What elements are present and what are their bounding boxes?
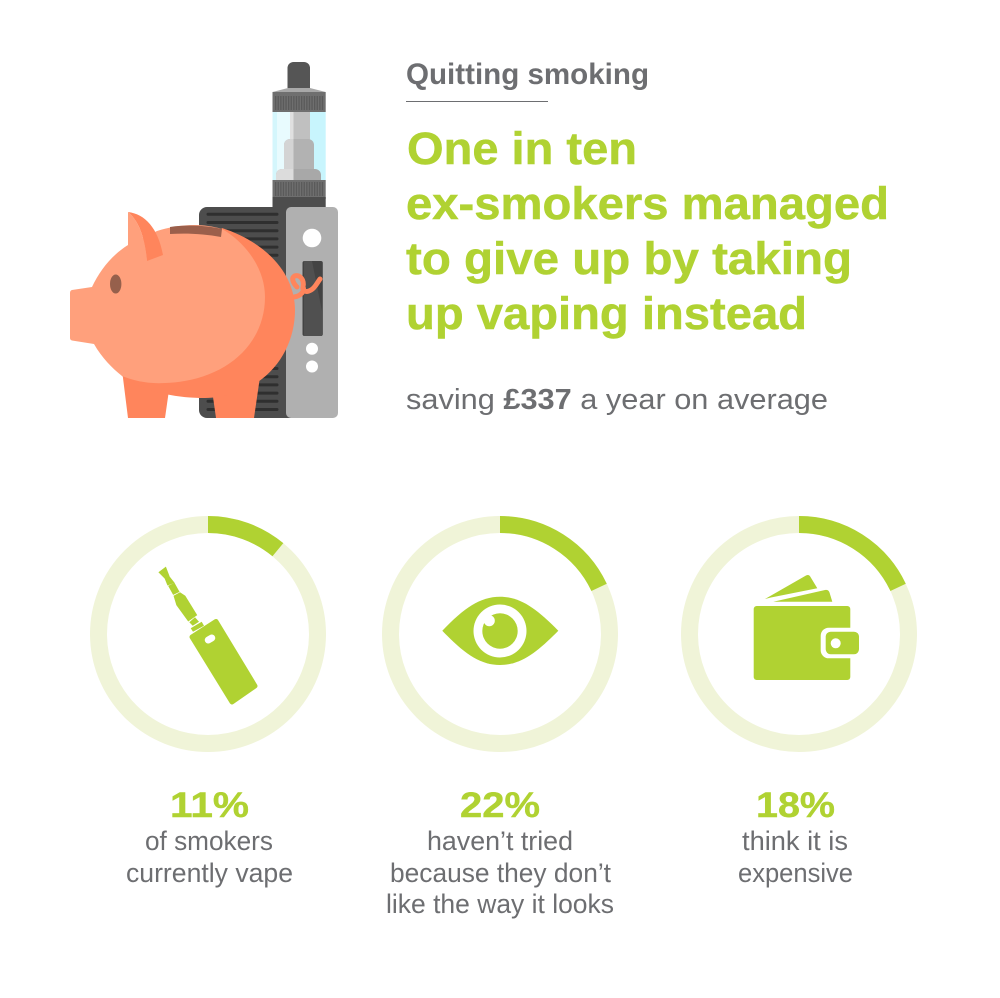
vape mouthpiece [288,62,310,88]
panel: 11% of smokers currently vape [98,524,318,888]
headline: to give up by taking [406,233,852,284]
headline: ex-smokers managed [406,178,889,229]
description: of smokers [145,826,273,856]
piggy tail [293,276,320,297]
icon: eye [442,597,558,665]
illustration: vape mod and piggy bank [70,62,338,418]
description: like the way it looks [386,889,614,919]
piggy bank [70,212,320,418]
donut chart 18% [690,524,908,744]
description [738,826,853,888]
headline: One in ten [407,123,637,174]
stat: 18% [756,786,835,825]
piggy eye [110,274,121,294]
description: think it is [742,826,848,856]
coin slot [170,226,222,237]
description: because they don’t [390,858,611,888]
stat: 22% [460,786,540,825]
headline: up vaping instead [406,288,807,339]
description: haven’t tried [427,826,573,856]
icon: wallet [754,575,866,680]
panel: 18% think it is expensive [690,524,908,888]
donut chart 22% [390,524,610,744]
panel: 22% haven't tried [386,524,614,919]
description: currently vape [126,858,293,888]
piggy legs [122,370,261,418]
icon: vape pen [159,567,255,702]
savings line: saving £337 a year on average [406,384,828,416]
description [386,826,614,919]
donut chart 11% [98,524,318,744]
vape mod control panel [286,207,338,418]
section label: Quitting smoking [406,58,649,91]
description: expensive [738,858,853,888]
piggy body shadow [122,228,295,398]
vape tank [272,88,326,209]
headline [406,123,889,339]
description [126,826,293,888]
piggy body and snout [70,225,265,383]
vape mod dark body [199,207,292,418]
stat: 11% [170,786,249,825]
piggy ear [128,212,163,261]
